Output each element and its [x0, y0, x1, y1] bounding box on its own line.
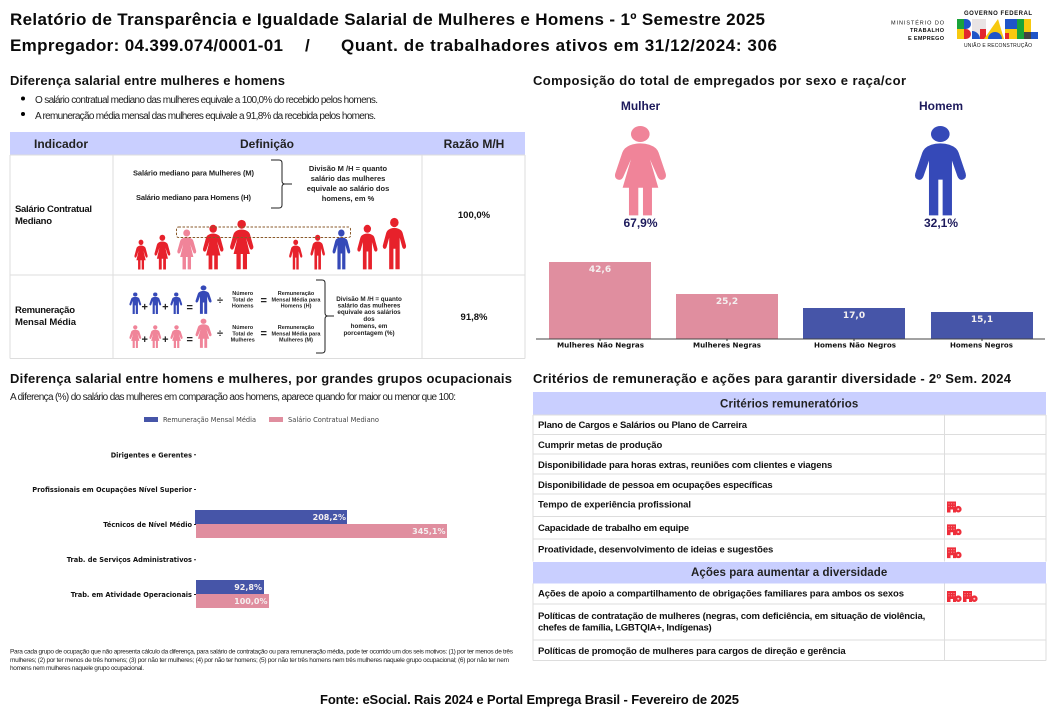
icon: homem: Homem	[919, 99, 963, 113]
table: critérios remuneratórios: Ações de apoio a compartilhamento de obrigações familiares para ambos os sexos	[538, 589, 904, 600]
footnote	[10, 649, 514, 672]
table: critérios remuneratórios: Políticas de contratação de mulheres (negras, com deficiência, em situação de violência,	[538, 611, 925, 622]
bar chart: composição: Homens Não Negros	[814, 342, 896, 350]
diagram: remuneração média: Homens	[232, 304, 254, 310]
logo: Ministério do Trabalho e Emprego: TRABALHO	[910, 28, 945, 34]
diagram: remuneração média	[129, 280, 402, 353]
title: Empregador: 04.399.074/0001-01	[10, 36, 283, 55]
title: Quant. de trabalhadores ativos em 31/12/2024: 306	[341, 36, 777, 55]
horizontal bar chart: Dirigentes e Gerentes	[111, 451, 192, 459]
horizontal bar chart: Profissionais em Ocupações Nível Superior	[32, 486, 193, 494]
table: indicadores: Salário Contratual	[15, 204, 92, 215]
panel: critérios	[533, 371, 1046, 660]
table: indicadores: Mensal Média	[15, 317, 77, 328]
diagram: remuneração média: =	[260, 328, 267, 340]
icons: building markers	[947, 502, 978, 602]
diagram: salário mediano	[133, 160, 406, 270]
logo: Governo Federal Brasil: UNIÃO E RECONSTRUÇÃO	[964, 42, 1032, 49]
horizontal bar chart	[32, 451, 447, 608]
bar chart: composição: 42,6	[589, 265, 611, 275]
horizontal bar chart: 100,0%	[234, 597, 268, 606]
icon: mulher: 67,9%	[623, 216, 658, 230]
bar chart: composição: 17,0	[843, 311, 865, 321]
diagram: remuneração média: +	[162, 302, 169, 314]
diagram: remuneração média: Divisão M /H = quanto	[336, 296, 402, 303]
diagram: salário mediano: equivale ao salário dos	[307, 184, 389, 193]
diagram: remuneração média: salário das mulheres	[338, 302, 401, 310]
diagram: remuneração média: equivale aos salários	[337, 309, 401, 316]
diagram: remuneração média: Mulheres (M)	[279, 338, 313, 344]
legend: Salário Contratual Mediano	[288, 416, 379, 424]
bar chart: composição: 25,2	[716, 297, 738, 307]
diagram: remuneração média: porcentagem (%)	[343, 330, 395, 337]
title	[10, 10, 777, 55]
heading: composição: Composição do total de empregados por sexo e raça/cor	[533, 73, 906, 88]
bar chart: composição: 15,1	[971, 315, 993, 325]
diagram: remuneração média: Total de	[232, 298, 253, 304]
bar chart: composição: Mulheres Negras	[693, 342, 761, 350]
icon: mulher	[615, 99, 666, 230]
bar chart: composição: Mulheres Não Negras	[557, 342, 644, 350]
table: critérios remuneratórios: Plano de Cargos e Salários ou Plano de Carreira	[538, 420, 748, 431]
table: indicadores: Mediano	[15, 216, 52, 227]
icon: mulher: Mulher	[621, 99, 660, 113]
heading: grupos ocupacionais: Diferença salarial entre homens e mulheres, por grandes grupos ocupacionais	[10, 371, 512, 386]
footnote: mulheres; (2) por ter menos de três homens; (3) por não ter mulheres; (4) por não ter homens; (5) por não ter três homens nem três mulheres naquele grupo ocupacional; (6) por não ter nem	[10, 657, 509, 664]
logo: Ministério do Trabalho e Emprego: E EMPREGO	[908, 36, 945, 42]
diagram: remuneração média: ÷	[217, 295, 223, 307]
diagram: remuneração média: =	[186, 302, 193, 314]
table: critérios remuneratórios: Disponibilidade de pessoa em ocupações específicas	[538, 480, 773, 491]
table: critérios remuneratórios: Disponibilidade para horas extras, reuniões com clientes e viagens	[538, 460, 832, 471]
panel: composição	[533, 73, 1045, 350]
bullet text: remuneração média: A remuneração média mensal das mulheres equivale a 91,8% da recebida pelos homens.	[35, 111, 376, 122]
diagram: remuneração média: Mensal Média para	[272, 298, 321, 304]
table: indicadores: Indicador	[34, 137, 88, 151]
table: indicadores: Razão M/H	[444, 137, 504, 151]
table: critérios remuneratórios: Políticas de promoção de mulheres para cargos de direção e gerência	[538, 646, 846, 657]
logo: Governo Federal Brasil: GOVERNO FEDERAL	[964, 11, 1032, 17]
table: critérios remuneratórios: Tempo de experiência profissional	[538, 500, 691, 511]
heading: diferença salarial: Diferença salarial entre mulheres e homens	[10, 73, 285, 88]
diagram: remuneração média: Total de	[232, 332, 253, 338]
diagram: remuneração média: ÷	[217, 328, 223, 340]
title: Relatório de Transparência e Igualdade Salarial de Mulheres e Homens - 1º Semestre 2025	[10, 10, 765, 29]
diagram: remuneração média: Mulheres	[231, 338, 255, 344]
diagram: salário mediano: homens, em %	[322, 194, 375, 203]
diagram: remuneração média: +	[141, 302, 148, 314]
table: indicadores	[10, 132, 525, 358]
table: critérios remuneratórios: chefes de família, LGBTQIA+, Indígenas)	[538, 622, 712, 633]
bar chart: composição: Homens Negros	[950, 342, 1013, 350]
table: indicadores: 91,8%	[461, 312, 488, 323]
footnote: homens nem mulheres naquele grupo ocupacional.	[10, 665, 144, 672]
diagram: remuneração média: +	[141, 334, 148, 346]
diagram: remuneração média: =	[260, 295, 267, 307]
table: critérios remuneratórios: Cumprir metas de produção	[538, 440, 662, 451]
horizontal bar chart: Técnicos de Nível Médio	[103, 521, 192, 529]
diagram: remuneração média: dos	[363, 316, 375, 323]
diagram: salário mediano: Salário mediano para Mulheres (M)	[133, 168, 254, 178]
logo: Ministério do Trabalho e Emprego: MINISTÉRIO DO	[891, 20, 945, 26]
diagram: remuneração média: Remuneração	[278, 291, 315, 297]
bullet text: salário contratual: O salário contratual mediano das mulheres equivale a 100,0% do recebido pelos homens.	[35, 95, 378, 106]
heading: critérios: Critérios de remuneração e ações para garantir diversidade - 2º Sem. 2024	[533, 371, 1012, 386]
diagram: salário mediano: salário das mulheres	[311, 174, 385, 183]
footnote: Para cada grupo de ocupação que não apresenta cálculo da diferença, para salário de contratação ou para remuneração média, pode ter ocorrido um dos seis motivos: (1) por ter menos de três	[10, 649, 514, 656]
table: critérios remuneratórios: Ações para aumentar a diversidade	[691, 567, 887, 579]
bar chart: composição	[536, 262, 1045, 350]
table: critérios remuneratórios: Critérios remuneratórios	[720, 399, 858, 411]
diagram: remuneração média: Homens (H)	[281, 304, 312, 310]
table: indicadores: 100,0%	[458, 210, 491, 221]
horizontal bar chart: 92,8%	[234, 583, 262, 592]
horizontal bar chart: Trab. em Atividade Operacionais	[71, 591, 192, 599]
diagram: remuneração média: Número	[232, 325, 254, 331]
logo: Ministério do Trabalho e Emprego	[891, 20, 945, 42]
horizontal bar chart: Trab. de Serviços Administrativos	[67, 556, 192, 564]
diagram: remuneração média: +	[162, 334, 169, 346]
legend	[144, 416, 379, 424]
horizontal bar chart: 345,1%	[412, 527, 446, 536]
panel: diferença salarial	[10, 73, 525, 358]
icon: homem	[915, 99, 966, 230]
diagram: salário mediano: Salário mediano para Homens (H)	[136, 193, 252, 202]
subtitle: A diferença (%) do salário das mulheres em comparação aos homens, aparece quando for maior ou menor que 100:	[10, 392, 456, 403]
panel: grupos ocupacionais	[10, 371, 514, 672]
table: indicadores: Remuneração	[15, 305, 75, 316]
legend: Remuneração Mensal Média	[163, 416, 256, 424]
table: critérios remuneratórios	[533, 392, 1046, 660]
diagram: remuneração média: homens, em	[351, 323, 388, 330]
table: indicadores: Definição	[240, 137, 294, 151]
table: critérios remuneratórios: Proatividade, desenvolvimento de ideias e sugestões	[538, 545, 773, 556]
diagram: salário mediano: Divisão M /H = quanto	[309, 164, 387, 173]
icon: homem: 32,1%	[924, 216, 958, 230]
horizontal bar chart: 208,2%	[313, 513, 346, 522]
table: critérios remuneratórios: Capacidade de trabalho em equipe	[538, 523, 689, 534]
logo: Governo Federal Brasil	[957, 11, 1038, 49]
diagram: remuneração média: Mensal Média para	[272, 332, 321, 338]
source: Fonte: eSocial. Rais 2024 e Portal Emprega Brasil - Fevereiro de 2025	[320, 692, 739, 707]
diagram: remuneração média: Número	[232, 291, 254, 297]
diagram: remuneração média: =	[186, 334, 193, 346]
title: /	[305, 36, 310, 55]
diagram: remuneração média: Remuneração	[278, 325, 315, 331]
